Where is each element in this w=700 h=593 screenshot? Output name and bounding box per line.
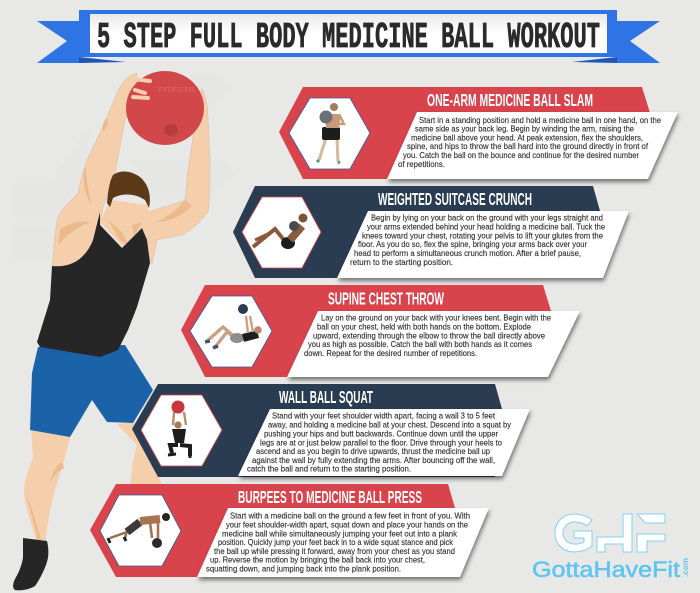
banner folds — [79, 57, 617, 63]
medicine ball — [126, 71, 204, 145]
body text: the ball up while pressing it forward, away from your chest as you stand — [214, 546, 455, 556]
hexagon image frame — [190, 296, 272, 367]
body text: you. Catch the ball on the bounce and continue for the desired number — [403, 150, 639, 160]
icon: man doing crunch — [253, 214, 308, 249]
body text: Lay on the ground on your back with your knees bent. Begin with the — [321, 313, 551, 323]
body text — [206, 511, 470, 574]
red banner — [90, 484, 455, 577]
hexagon image frame — [100, 495, 181, 566]
banner body — [79, 10, 617, 57]
body text: medicine ball above your head. At peak extension, flex the shoulders, — [411, 132, 643, 142]
body text: Start with a medicine ball on the ground a few feet in front of you. With — [230, 511, 470, 521]
text card — [197, 508, 489, 577]
body text: legs are at or just below parallel to the floor. Drive through your heels to — [260, 437, 502, 447]
body text: same side as your back leg. Begin by winding the arm, raising the — [415, 124, 634, 134]
navy banner — [233, 186, 600, 278]
leg shading — [26, 462, 64, 540]
logo wordmark: GottaHaveFit — [532, 557, 680, 582]
red banner — [279, 87, 650, 179]
text card — [238, 409, 530, 476]
heading: ONE-ARM MEDICINE BALL SLAM — [427, 90, 593, 110]
body text: your feet shoulder-width apart, squat down and place your hands on the — [226, 519, 468, 529]
left arm and shoulder — [52, 73, 137, 266]
body text: Stand with your feet shoulder width apart, facing a wall 3 to 5 feet — [272, 411, 496, 421]
body text: against the wall by fully extending the arms. After bouncing off the wall, — [252, 455, 495, 465]
logo monogram GHF — [555, 514, 665, 552]
banner right tail — [617, 21, 660, 63]
logo .com: .com — [681, 558, 690, 577]
text card — [287, 311, 580, 377]
body text: ascend and as you begin to drive upwards, thrust the medicine ball up — [256, 446, 490, 456]
ball grip spot — [164, 124, 178, 136]
body text: position. Quickly jump your feet back in to a wide squat stance and pick — [218, 537, 454, 547]
body text: spine, and hips to throw the ball hard into the ground directly in front of — [407, 141, 649, 151]
hair — [107, 171, 150, 208]
body text: ball on your chest, held with both hands on the bottom. Explode — [317, 321, 531, 331]
body text: your arms extended behind your head holding a medicine ball. Tuck the — [367, 222, 605, 232]
body text: you as high as possible. Catch the ball with both hands as it comes — [308, 339, 532, 349]
body text: up. Reverse the motion by bringing the ball back into your chest, — [210, 555, 425, 565]
ball logo: FITFSTR — [158, 87, 195, 94]
panel: supine chest throw — [181, 285, 580, 377]
body text: medicine ball while simultaneously jumping your feet out into a plank — [222, 528, 458, 538]
body text — [398, 115, 661, 169]
banner left tail — [37, 21, 79, 63]
tank top — [37, 212, 150, 357]
neck and face — [100, 200, 148, 249]
hexagon image frame — [289, 98, 370, 169]
right arm and shoulder — [140, 88, 210, 264]
panel: wall ball squat — [132, 384, 530, 477]
arm shading — [58, 117, 192, 245]
icon: man squatting with ball overhead — [168, 400, 190, 458]
body text: knees toward your chest, rotating your pelvis to lift your glutes from the — [362, 230, 603, 240]
heading: WEIGHTED SUITCASE CRUNCH — [378, 189, 532, 209]
text card — [387, 112, 678, 179]
icon: man throwing ball lying down — [205, 304, 262, 348]
hexagon image frame — [141, 395, 222, 466]
panel: burpees to medicine ball press — [90, 484, 489, 577]
red banner — [181, 285, 551, 377]
panel: one-arm medicine ball slam — [279, 87, 678, 179]
heading: WALL BALL SQUAT — [279, 387, 373, 407]
body text: pushing your hips and butt backwards. Continue down until the upper — [264, 428, 498, 438]
banner inner panel — [90, 14, 607, 53]
face shading — [108, 220, 142, 245]
shoe — [13, 538, 48, 590]
title banner — [37, 10, 660, 63]
fingers — [133, 79, 150, 98]
athlete illustration — [13, 71, 210, 590]
left leg — [24, 430, 70, 543]
body text: of repetitions. — [398, 159, 445, 169]
body text: Begin by lying on your back on the ground with your legs straight and — [371, 213, 603, 223]
body text: return to the starting position. — [350, 257, 453, 267]
body text: away, and holding a medicine ball at your chest. Descend into a squat by — [268, 420, 512, 430]
body text — [304, 313, 551, 358]
body text — [350, 213, 605, 267]
body text: floor. As you do so, flex the spine, bringing your arms back over your — [358, 239, 587, 249]
right leg — [117, 422, 162, 486]
body text: catch the ball and return to the starting position. — [247, 464, 411, 474]
hexagon image frame — [242, 197, 321, 268]
icon: man in plank on ball — [108, 513, 170, 548]
body text: Start in a standing position and hold a medicine ball in one hand, on the — [419, 115, 661, 125]
body text — [247, 411, 512, 474]
body text: squatting down, and jumping back into the plank position. — [206, 564, 401, 574]
navy banner — [132, 384, 502, 477]
icon: man holding ball — [317, 103, 344, 163]
text card — [337, 211, 629, 278]
logo: GottaHaveFit — [532, 514, 690, 582]
heading: BURPEES TO MEDICINE BALL PRESS — [238, 487, 422, 507]
heading: SUPINE CHEST THROW — [328, 288, 444, 308]
body text: head to perform a simultaneous crunch motion. After a brief pause, — [354, 248, 581, 258]
background watermark shapes — [14, 73, 235, 260]
body text: upward, extending through the elbow to throw the ball directly above — [313, 330, 545, 340]
shorts — [30, 345, 153, 437]
panel: weighted suitcase crunch — [233, 186, 629, 278]
body text: down. Repeat for the desired number of repetitions. — [304, 348, 477, 358]
